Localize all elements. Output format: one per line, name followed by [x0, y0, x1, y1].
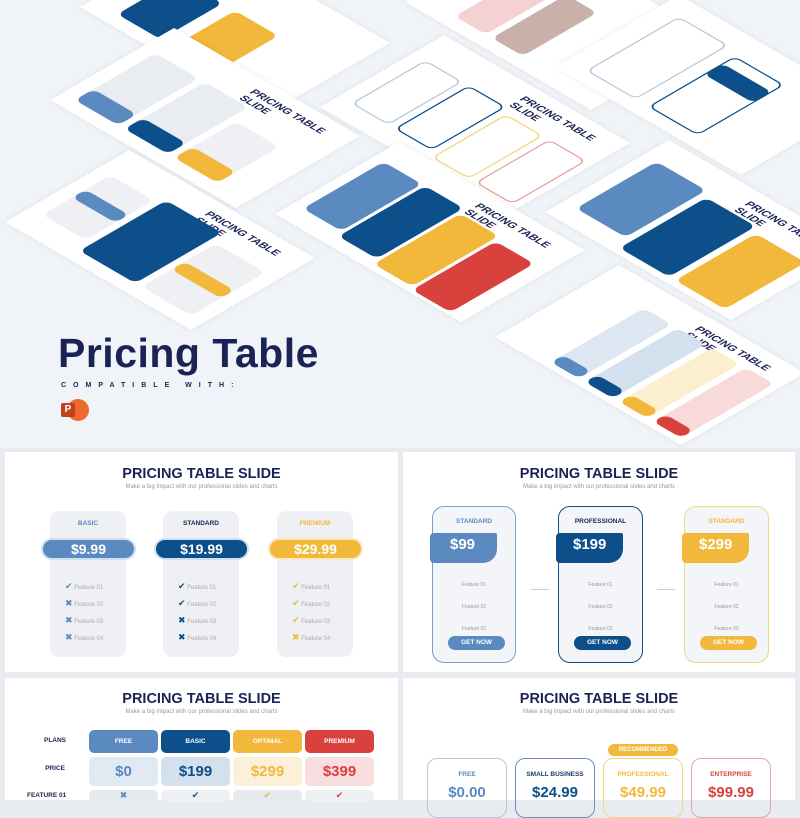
main title: Pricing Table	[58, 330, 319, 376]
slide: personal business: PRICING TABLE SLIDE	[191, 210, 284, 257]
feature lists	[65, 581, 103, 642]
panel: tab price cards: $199	[573, 536, 606, 553]
card: professional recommended: $49.99	[620, 784, 666, 801]
panel: comparison table: ✔	[336, 790, 343, 800]
panel: three plan cards: ✖ Feature 04	[292, 632, 330, 642]
slide: free small business	[320, 35, 630, 215]
card: small business: $24.99	[532, 784, 578, 801]
connectors	[531, 589, 549, 590]
feature rows: Feature 02	[462, 604, 486, 610]
card: free: $0.00	[448, 784, 486, 801]
buttons: GET NOW	[461, 639, 492, 646]
price tabs	[430, 533, 497, 563]
slide: tag prices	[545, 140, 800, 320]
panel: comparison table: BASIC	[185, 738, 206, 745]
heading: PRICING TABLE SLIDE	[122, 466, 281, 482]
panel: comparison table: FEATURE 01	[27, 792, 66, 799]
price cells	[89, 757, 158, 786]
compatible with label: COMPATIBLE WITH:	[61, 382, 240, 389]
feature row	[89, 790, 158, 802]
panel: three plan cards	[5, 452, 398, 672]
slide: right standard	[555, 0, 800, 175]
slide: free basic optimal premium	[275, 142, 585, 322]
panel: three plan cards: ✖ Feature 03	[178, 615, 216, 625]
panel: comparison table: ✔	[192, 790, 199, 800]
panel: tab price cards: PROFESSIONAL	[575, 518, 626, 525]
card: enterprise	[691, 758, 771, 818]
panel: comparison table: PRICE	[45, 765, 65, 772]
panel: three plan cards: ✔ Feature 03	[292, 615, 330, 625]
card: professional recommended	[603, 758, 683, 818]
card: free: FREE	[458, 771, 476, 778]
card: standard	[163, 511, 239, 657]
panel: tab price cards: GET NOW	[713, 639, 744, 646]
feature row: ✖	[120, 790, 127, 800]
card: standard yellow	[684, 506, 769, 663]
slide: basic standard: PRICING TABLE SLIDE	[236, 88, 329, 135]
row labels: PLANS	[44, 737, 66, 744]
card: standard blue	[432, 506, 516, 663]
panel: comparison table: $399	[323, 763, 356, 780]
panel: three plan cards: ✔ Feature 01	[178, 581, 216, 591]
panel: outlined plan cards: PRICING TABLE SLIDE	[520, 691, 678, 707]
panel: three plan cards: $29.99	[294, 541, 337, 557]
icon: powerpoint	[61, 399, 89, 421]
slide: free basic optimal premium: PRICING TABLE SLIDE	[461, 202, 554, 249]
feature lists: ✖ Feature 03	[65, 615, 103, 625]
card: enterprise: ENTERPRISE	[710, 771, 752, 778]
panel: tab price cards: STANDARD	[456, 518, 492, 525]
panel: tab price cards: Feature 01	[714, 582, 739, 588]
feature rows: Feature 01	[462, 582, 486, 588]
panel: tab price cards: $299	[699, 536, 732, 553]
panel: comparison table: Make a big impact with our professional slides and charts	[125, 709, 278, 715]
card: free	[427, 758, 507, 818]
icon: powerpoint: P	[65, 404, 71, 415]
panel: three plan cards: ✔ Feature 02	[178, 598, 216, 608]
feature rows	[462, 582, 486, 632]
panel: comparison table: ✔	[264, 790, 271, 800]
panel: outlined plan cards	[403, 678, 795, 800]
panel: tab price cards: STANDARD	[708, 518, 744, 525]
panel: outlined plan cards: Make a big impact with our professional slides and charts	[523, 709, 675, 715]
panel: tab price cards: Make a big impact with our professional slides and charts	[523, 484, 675, 490]
card: premium	[277, 511, 353, 657]
feature lists: ✔ Feature 01	[65, 581, 103, 591]
slide: top right table	[405, 0, 715, 110]
slide: comparison table: PRICING TABLE SLIDE	[681, 325, 774, 372]
slide: personal business	[5, 150, 315, 330]
card: enterprise: $99.99	[708, 784, 754, 801]
panel: three plan cards: ✖ Feature 04	[178, 632, 216, 642]
panel: tab price cards	[403, 452, 795, 672]
buttons	[448, 636, 505, 650]
price pills: $9.99	[71, 541, 106, 557]
panel: tab price cards: Feature 02	[714, 604, 739, 610]
card: basic	[50, 511, 126, 657]
panel: three plan cards: STANDARD	[183, 520, 219, 527]
slide: comparison table	[495, 265, 800, 445]
panel: comparison table: PRICING TABLE SLIDE	[122, 691, 281, 707]
panel: comparison table: $299	[251, 763, 284, 780]
panel: tab price cards: Feature 01	[588, 582, 613, 588]
card: professional	[558, 506, 643, 663]
slide: basic standard	[50, 28, 360, 208]
panel: tab price cards: GET NOW	[587, 639, 618, 646]
badge: recommended	[608, 744, 678, 756]
panel: three plan cards: PREMIUM	[300, 520, 330, 527]
card: small business: SMALL BUSINESS	[526, 771, 584, 778]
badge: recommended: RECOMMENDED	[619, 747, 667, 753]
slide: top left	[80, 0, 390, 115]
panel: comparison table: PREMIUM	[324, 738, 355, 745]
panel: three plan cards: Make a big impact with our professional slides and charts	[125, 484, 278, 490]
panel: comparison table: OPTIMAL	[253, 738, 282, 745]
card: small business	[515, 758, 595, 818]
feature lists: ✖ Feature 04	[65, 632, 103, 642]
hero: isometric slide collage	[0, 0, 800, 448]
panel: tab price cards: Feature 03	[714, 626, 739, 632]
header cells	[89, 730, 158, 753]
panel: tab price cards: Feature 02	[588, 604, 613, 610]
panel: tab price cards: PRICING TABLE SLIDE	[520, 466, 678, 482]
feature lists: ✖ Feature 02	[65, 598, 103, 608]
slide: free small business: PRICING TABLE SLIDE	[506, 95, 599, 142]
feature rows: Feature 03	[462, 626, 486, 632]
header cells: FREE	[115, 738, 132, 745]
panel: three plan cards: BASIC	[78, 520, 98, 527]
panel: tab price cards: Feature 03	[588, 626, 613, 632]
panel: three plan cards: ✔ Feature 02	[292, 598, 330, 608]
price tabs: $99	[450, 536, 475, 553]
panel: comparison table	[5, 678, 398, 800]
price cells: $0	[115, 763, 132, 780]
card: professional recommended: PROFESSIONAL	[617, 771, 669, 778]
panel: three plan cards: $19.99	[180, 541, 223, 557]
panel: comparison table: $199	[179, 763, 212, 780]
panel: three plan cards: ✔ Feature 01	[292, 581, 330, 591]
price pills	[41, 538, 136, 560]
